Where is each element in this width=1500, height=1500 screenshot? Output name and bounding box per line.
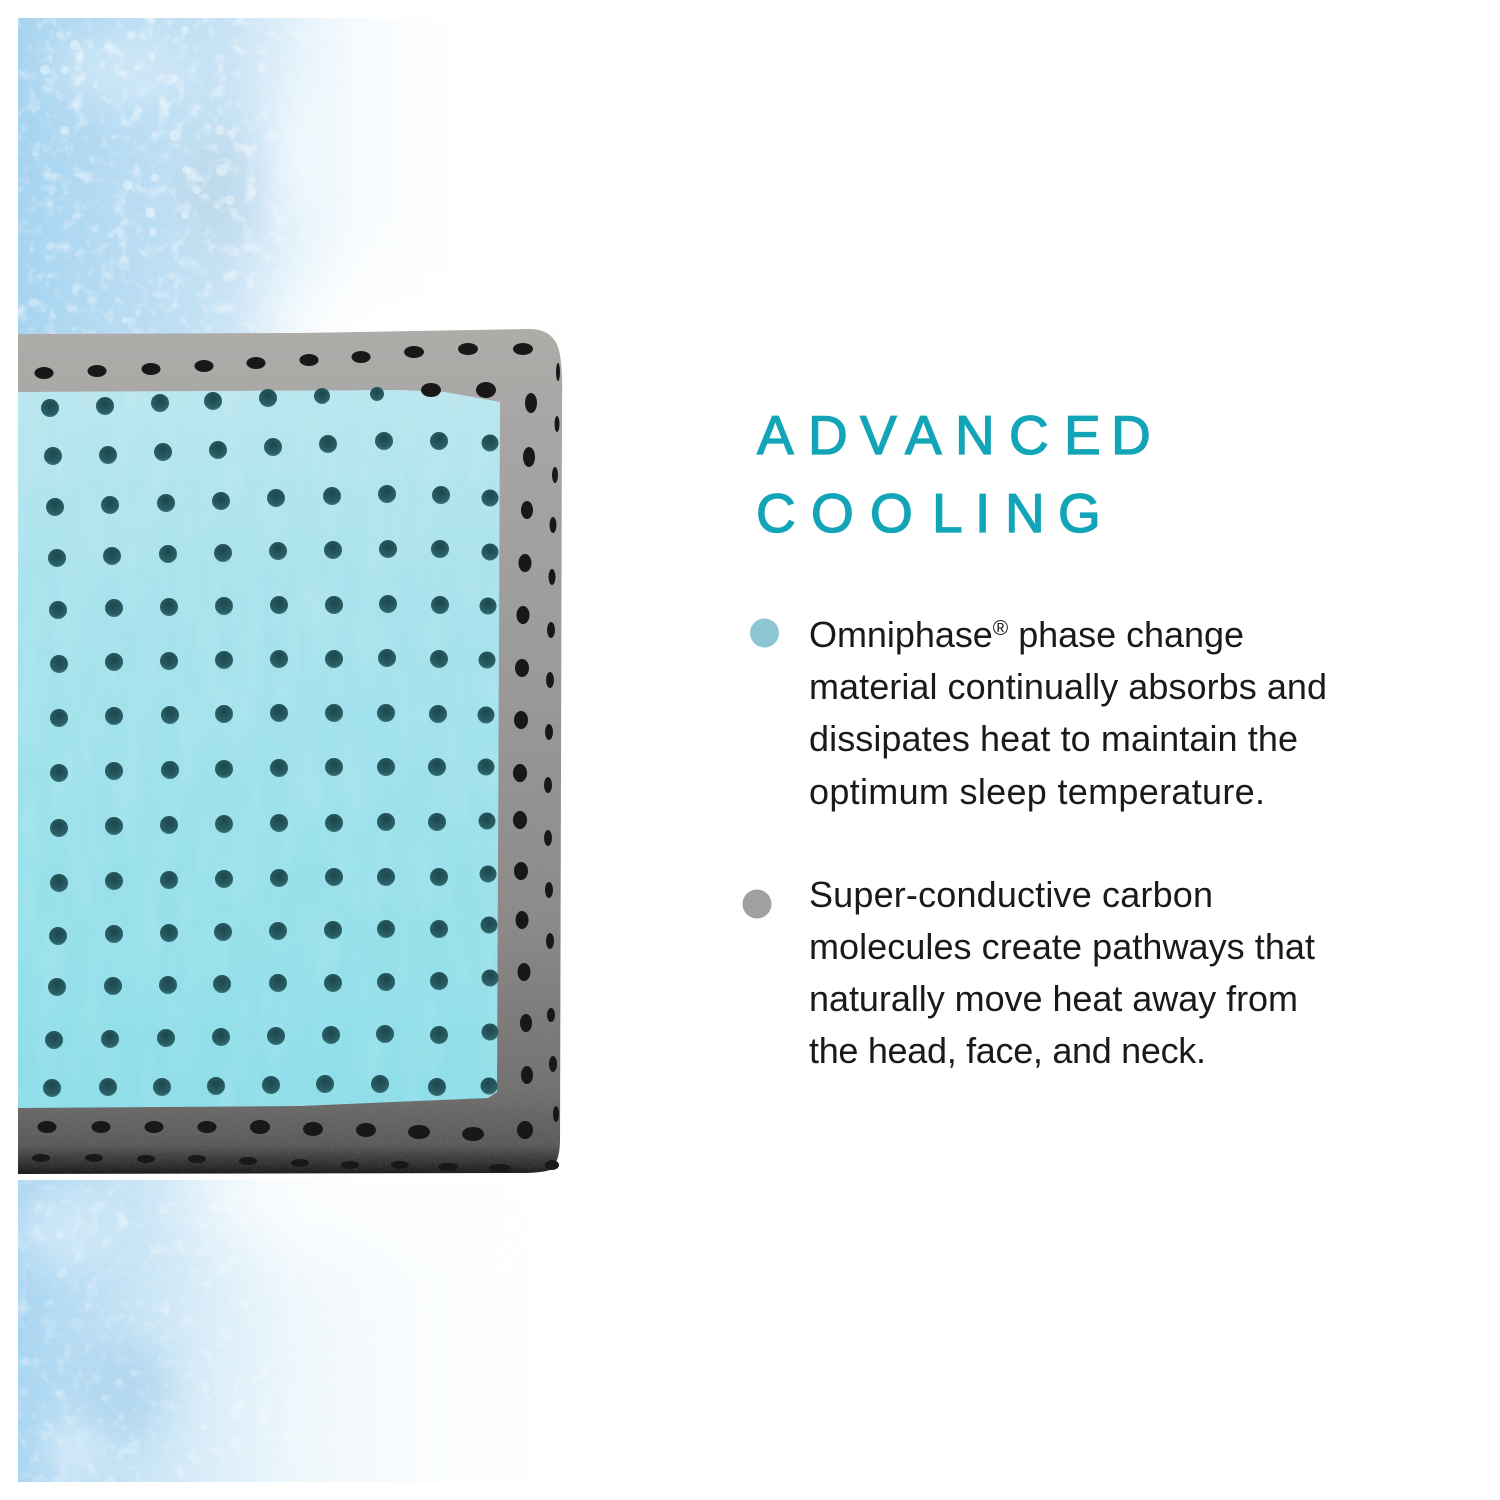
text: phase change material bbox=[809, 614, 1327, 812]
background: icy blue texture top bbox=[18, 18, 358, 334]
text: phase change material: dissipates heat to maintain the bbox=[809, 718, 1298, 759]
bullet: phase change material bbox=[750, 614, 1327, 812]
text: carbon molecules: Super-conductive carbon bbox=[809, 874, 1213, 915]
perforations in foam shell bbox=[32, 343, 560, 1172]
icon: grey dot bbox=[742, 890, 772, 918]
text: phase change material: ® bbox=[993, 617, 1009, 640]
perforations in cooling gel bbox=[41, 387, 498, 1097]
background: icy blue texture bottom bbox=[18, 1180, 388, 1482]
title: COOLING bbox=[756, 482, 1101, 544]
cooling gel surface bbox=[18, 388, 502, 1110]
text: carbon molecules: the head, face, and neck. bbox=[809, 1030, 1206, 1071]
text: phase change material: optimum sleep temperature. bbox=[809, 771, 1265, 812]
title bbox=[756, 404, 1151, 544]
text: carbon molecules: naturally move heat away from bbox=[809, 978, 1298, 1019]
pillow cross-section bbox=[18, 329, 562, 1174]
icon: teal dot bbox=[750, 618, 779, 648]
text: phase change material: material continually absorbs and bbox=[809, 666, 1327, 707]
text: phase change material: phase change bbox=[1008, 614, 1244, 655]
text: carbon molecules bbox=[809, 874, 1315, 1071]
text: carbon molecules: molecules create pathways that bbox=[809, 926, 1315, 967]
text: phase change material: Omniphase bbox=[809, 614, 993, 655]
bullet: carbon molecules bbox=[742, 874, 1315, 1071]
title: ADVANCED bbox=[757, 404, 1151, 466]
pillow foam shell bbox=[18, 329, 562, 1174]
